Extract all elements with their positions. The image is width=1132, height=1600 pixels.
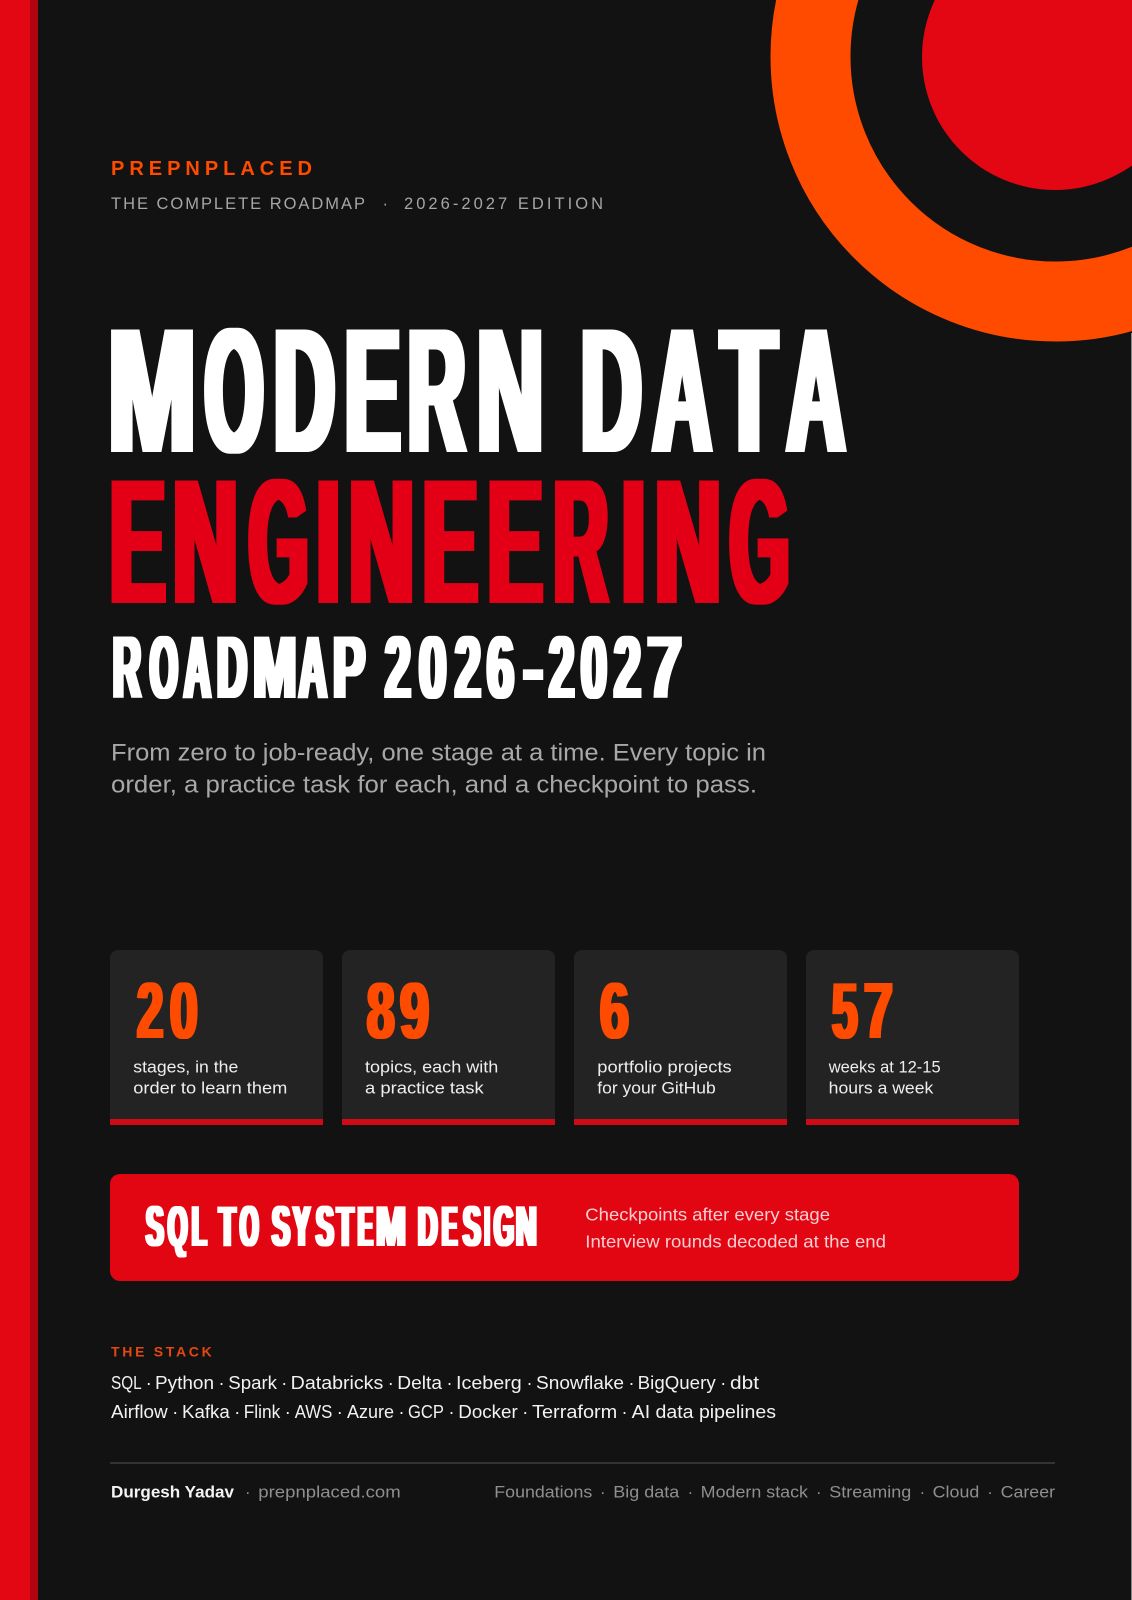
title line: engineering xyxy=(110,442,790,641)
stat card: weeks xyxy=(806,950,1019,1125)
title line: modern data xyxy=(108,291,847,490)
topic list: Career xyxy=(1001,1483,1056,1501)
title line: engineering: I xyxy=(622,442,645,641)
stack list: line two: · xyxy=(172,1402,178,1422)
stack list: line two: Azure xyxy=(347,1402,394,1422)
edition line: · xyxy=(382,195,388,213)
title line: roadmap: - xyxy=(523,618,543,717)
stack list: line two: Terraform xyxy=(532,1402,617,1422)
stack list: line one: · xyxy=(628,1373,634,1393)
banner notes: Checkpoints after every stage xyxy=(585,1205,830,1225)
title line: roadmap: 2 xyxy=(455,618,480,717)
number 89 xyxy=(366,966,430,1055)
title line: engineering: N xyxy=(349,442,414,641)
title line: engineering: E xyxy=(423,442,478,641)
number 20 xyxy=(136,966,198,1055)
stack list: line one: SQL xyxy=(111,1373,142,1393)
intro paragraph xyxy=(111,740,766,799)
banner heading: Y xyxy=(293,1195,310,1259)
caption: weeks at 12-15 xyxy=(828,1059,941,1077)
title line: roadmap: D xyxy=(217,618,247,717)
title line: modern data: N xyxy=(477,291,544,490)
caption xyxy=(133,1059,287,1097)
stack list: line one: · xyxy=(720,1373,726,1393)
stack list: line one: · xyxy=(526,1373,532,1393)
banner heading: L xyxy=(192,1195,206,1259)
number 89: 9 xyxy=(400,966,429,1055)
stack list: line two: · xyxy=(622,1402,628,1422)
stat card: projects xyxy=(574,950,787,1125)
stack list: line two: · xyxy=(234,1402,240,1422)
footer: · xyxy=(245,1483,250,1501)
stack list: line two: Kafka xyxy=(182,1402,231,1422)
author: Durgesh Yadav xyxy=(111,1483,235,1501)
topic list: Modern stack xyxy=(701,1483,809,1501)
title line: roadmap: 2 xyxy=(549,618,574,717)
stack list: line two: GCP xyxy=(408,1402,444,1422)
topic list: Streaming xyxy=(829,1483,911,1501)
title line: modern data: A xyxy=(653,291,711,490)
title line: modern data: D xyxy=(274,291,334,490)
number 57: 7 xyxy=(864,966,893,1055)
stack list: line one: Snowflake xyxy=(536,1373,624,1393)
stack list: line one: Delta xyxy=(397,1373,443,1393)
caption xyxy=(597,1059,732,1097)
stack list: line two: Docker xyxy=(458,1402,518,1422)
stack list: line two: Flink xyxy=(244,1402,281,1422)
banner heading: D xyxy=(418,1195,438,1259)
title line: modern data: A xyxy=(787,291,845,490)
title line: roadmap: 7 xyxy=(647,618,682,717)
edition line: 2026-2027 EDITION xyxy=(404,195,603,213)
title line: engineering: E xyxy=(110,442,165,641)
stack list: line one: · xyxy=(388,1373,394,1393)
title line: modern data: D xyxy=(581,291,641,490)
brand name: PREPNPLACED xyxy=(111,158,312,180)
red banner xyxy=(110,1174,1019,1281)
number 89: 8 xyxy=(367,966,395,1055)
topic list: Foundations xyxy=(494,1483,592,1501)
number 6: 6 xyxy=(600,966,628,1055)
stat card: topics xyxy=(342,950,555,1125)
website: prepnplaced.com xyxy=(258,1483,401,1501)
caption: topics, each with xyxy=(365,1059,498,1077)
caption: a practice task xyxy=(365,1079,485,1097)
stack heading: THE STACK xyxy=(111,1344,212,1360)
stack list: line two: · xyxy=(398,1402,404,1422)
stack list: line two: Airflow xyxy=(111,1402,169,1422)
stack list: line one: Python xyxy=(155,1373,214,1393)
banner heading: I xyxy=(485,1195,489,1259)
title line: roadmap: 2 xyxy=(385,618,411,717)
banner heading: Q xyxy=(168,1195,188,1259)
stack list: line two: · xyxy=(337,1402,343,1422)
number 57: 5 xyxy=(832,966,858,1055)
topic list xyxy=(494,1483,1056,1501)
caption xyxy=(365,1059,498,1097)
main title xyxy=(108,291,847,717)
topic list: · xyxy=(920,1483,925,1501)
number 57 xyxy=(831,966,893,1055)
banner heading: E xyxy=(442,1195,458,1259)
topic list: · xyxy=(987,1483,993,1501)
right edge hairline xyxy=(1131,333,1132,1600)
caption: order to learn them xyxy=(133,1079,287,1097)
title line: roadmap: 6 xyxy=(487,618,514,717)
topic list: · xyxy=(816,1483,822,1501)
stack list: line one: · xyxy=(446,1373,452,1393)
caption xyxy=(828,1059,941,1097)
intro paragraph: order, a practice task for each, and a checkpoint to pass. xyxy=(111,772,757,799)
title line: roadmap: M xyxy=(253,618,296,717)
title line: engineering: R xyxy=(554,442,608,641)
decorative concentric circles xyxy=(770,0,1132,342)
stack list: line two: AWS xyxy=(295,1402,332,1422)
stack list: line one: Spark xyxy=(228,1373,278,1393)
banner notes xyxy=(585,1205,886,1251)
title line: roadmap: P xyxy=(333,618,365,717)
title line: modern data: R xyxy=(408,291,465,490)
title line: roadmap: A xyxy=(184,618,211,717)
banner heading: G xyxy=(494,1195,514,1259)
stack list: line two xyxy=(111,1402,776,1422)
banner heading: E xyxy=(358,1195,373,1259)
title line: modern data: T xyxy=(721,291,777,490)
stack list: line two: · xyxy=(522,1402,528,1422)
number 20: 2 xyxy=(137,966,163,1055)
caption: stages, in the xyxy=(133,1059,238,1077)
banner heading: S xyxy=(316,1195,333,1259)
brand header xyxy=(111,158,603,213)
banner heading: S xyxy=(146,1195,163,1259)
title line: roadmap: R xyxy=(113,618,141,717)
title line: roadmap: 2 xyxy=(614,618,641,717)
banner heading: N xyxy=(516,1195,537,1259)
title line: modern data: M xyxy=(108,291,196,490)
topic list: Big data xyxy=(613,1483,680,1501)
topic list: · xyxy=(600,1483,606,1501)
stack list: line one: BigQuery xyxy=(638,1373,716,1393)
stack list: line one: · xyxy=(146,1373,152,1393)
stat card: stages xyxy=(110,950,323,1125)
title line: roadmap xyxy=(113,618,682,717)
title line: roadmap: O xyxy=(150,618,177,717)
banner heading: S xyxy=(272,1195,289,1259)
stack list: line one: dbt xyxy=(730,1373,759,1393)
title line: roadmap: 0 xyxy=(419,618,446,717)
the stack xyxy=(111,1344,776,1422)
banner heading: M xyxy=(376,1195,406,1259)
number 20: 0 xyxy=(170,966,197,1055)
caption: portfolio projects xyxy=(597,1059,732,1077)
stack list: line one: Databricks xyxy=(291,1373,383,1393)
left accent bar xyxy=(0,0,38,1600)
banner heading: T xyxy=(337,1195,354,1259)
banner heading: S xyxy=(463,1195,480,1259)
stack list: line two: · xyxy=(448,1402,454,1422)
banner heading: O xyxy=(240,1195,259,1259)
topic list: · xyxy=(688,1483,693,1501)
title line: modern data: O xyxy=(205,291,263,490)
title line: engineering: E xyxy=(488,442,543,641)
stack list: line one: · xyxy=(218,1373,224,1393)
title line: engineering: N xyxy=(655,442,721,641)
stack list: line one xyxy=(111,1373,759,1393)
topic list: Cloud xyxy=(933,1483,979,1501)
footer divider xyxy=(110,1462,1055,1464)
footer xyxy=(111,1483,1056,1501)
title line: engineering: G xyxy=(249,442,308,641)
edition line: THE COMPLETE ROADMAP xyxy=(111,195,365,213)
stack list: line one: Iceberg xyxy=(456,1373,522,1393)
banner heading: T xyxy=(219,1195,235,1259)
title line: engineering: I xyxy=(317,442,339,641)
intro paragraph: From zero to job-ready, one stage at a time. Every topic in xyxy=(111,740,766,767)
title line: engineering: N xyxy=(173,442,238,641)
caption: for your GitHub xyxy=(597,1079,716,1097)
banner heading xyxy=(144,1195,537,1259)
title line: engineering: G xyxy=(730,442,790,641)
stack list: line one: · xyxy=(281,1373,287,1393)
stack list: line two: AI data pipelines xyxy=(632,1402,776,1422)
caption: hours a week xyxy=(829,1079,934,1097)
title line: roadmap: A xyxy=(299,618,327,717)
banner notes: Interview rounds decoded at the end xyxy=(585,1231,886,1251)
stack list: line two: · xyxy=(285,1402,291,1422)
edition line xyxy=(111,195,603,213)
title line: roadmap: 0 xyxy=(581,618,606,717)
title line: modern data: E xyxy=(345,291,400,490)
